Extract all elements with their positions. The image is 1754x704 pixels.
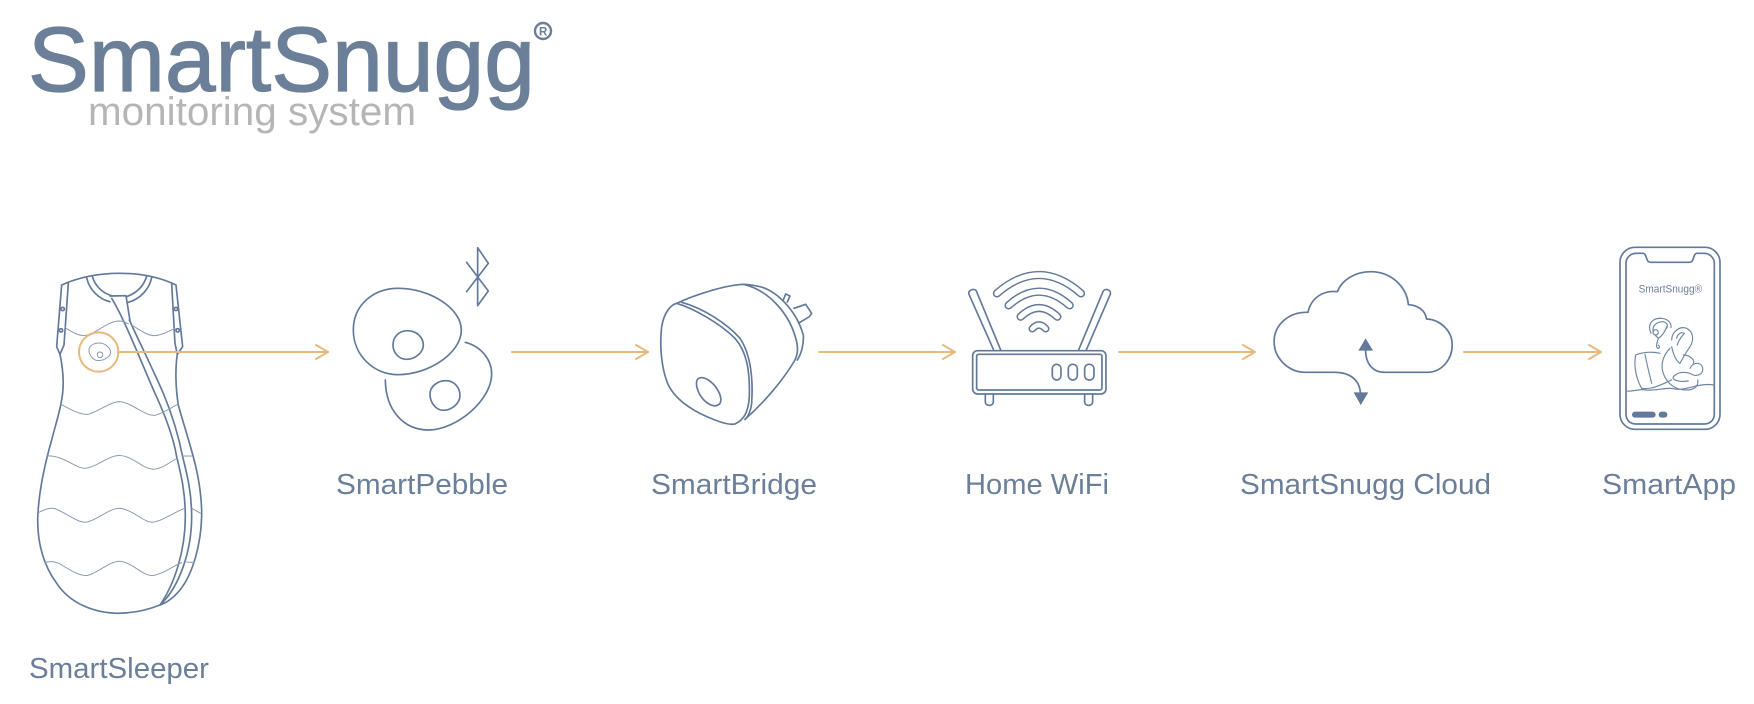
registered mark [535, 23, 551, 39]
label: SmartSleeper: SmartSleeper [29, 653, 209, 685]
logo subtitle: monitoring system [88, 90, 416, 134]
logo [28, 9, 551, 134]
icon: SmartBridge plug [661, 284, 812, 424]
icon: bluetooth symbol [467, 248, 488, 306]
icon: SmartSleeper sleeping bag [38, 273, 202, 613]
arrow: sleeper to pebble [118, 345, 328, 359]
label: SmartPebble: SmartPebble [336, 469, 508, 501]
logo wordmark: SmartSnugg [28, 9, 535, 111]
phone illustration: parents and baby [1626, 318, 1714, 391]
label: Home WiFi: Home WiFi [965, 469, 1109, 501]
label: SmartBridge: SmartBridge [651, 469, 817, 501]
icon: SmartSnugg cloud [1274, 272, 1452, 405]
arrow: pebble to bridge [512, 345, 648, 359]
icon: home wifi router [969, 275, 1110, 405]
icon: wifi signal arcs [997, 275, 1081, 329]
icon: SmartApp phone [1620, 247, 1720, 429]
label: SmartSnugg Cloud: SmartSnugg Cloud [1240, 469, 1491, 501]
phone screen logo: SmartSnugg® [1639, 283, 1702, 295]
icon: SmartPebble with bluetooth [353, 248, 492, 430]
arrow: cloud to app [1464, 345, 1601, 359]
sleeper pebble highlight [79, 332, 118, 372]
registered mark: R [539, 26, 548, 38]
arrow: wifi to cloud [1119, 345, 1255, 359]
arrow: bridge to wifi [819, 345, 955, 359]
sleeper quilting waves [38, 321, 201, 576]
label: SmartApp: SmartApp [1602, 469, 1736, 501]
